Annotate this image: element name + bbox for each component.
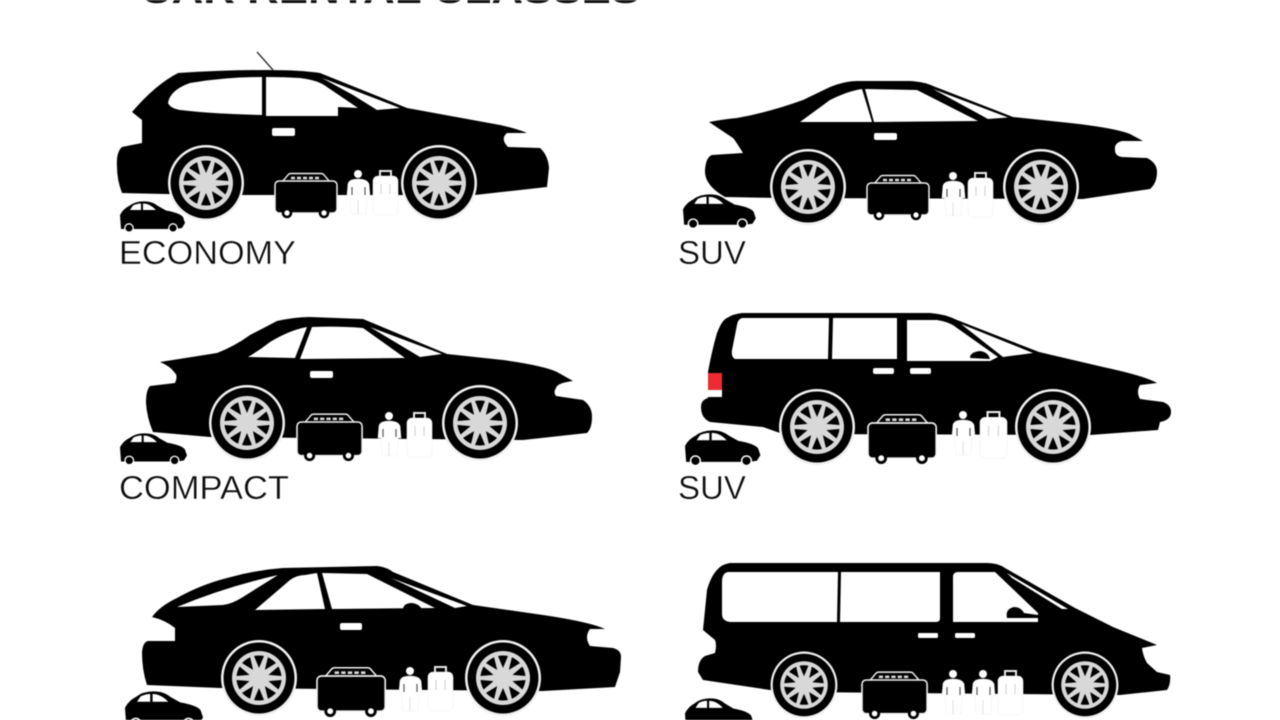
- compact luggage: [297, 414, 362, 460]
- economy luggage: [275, 174, 337, 217]
- minivan luggage: [862, 672, 927, 718]
- minivan small car icon: [685, 698, 753, 720]
- compact label: COMPACT: [119, 469, 289, 506]
- panel: minivan: [685, 563, 1170, 720]
- hatchback passenger: [399, 667, 422, 711]
- minivan first passenger: [942, 670, 965, 714]
- coupe small car icon: [683, 194, 756, 228]
- coupe luggage: [867, 176, 929, 219]
- wagon small car icon: [685, 430, 760, 466]
- hatchback small car icon: [125, 691, 203, 720]
- hatchback luggage: [317, 668, 385, 716]
- economy wheels: [168, 145, 477, 221]
- wagon label: SUV: [678, 469, 746, 506]
- wagon suitcase: [980, 412, 1007, 458]
- compact passenger: [378, 412, 401, 456]
- compact wheels: [209, 385, 518, 461]
- minivan wheels: [771, 652, 1118, 718]
- economy label: ECONOMY: [119, 234, 296, 271]
- minivan suitcase: [998, 671, 1023, 715]
- wagon passenger: [952, 411, 975, 455]
- economy car body: [117, 52, 549, 195]
- coupe passenger: [942, 172, 965, 216]
- minivan second passenger: [972, 670, 995, 714]
- hatchback suitcase: [428, 667, 453, 711]
- minivan body: [698, 563, 1170, 695]
- panel: top right car: [678, 81, 1157, 271]
- economy suitcase: [373, 171, 398, 215]
- coupe suitcase: [968, 173, 993, 217]
- coupe body: [705, 81, 1157, 199]
- panel: compact car: [119, 317, 592, 506]
- panel: wagon: [678, 313, 1171, 506]
- wagon wheels: [779, 389, 1091, 465]
- panel: economy car: [117, 52, 549, 271]
- compact small car icon: [120, 433, 187, 465]
- compact body: [146, 317, 592, 440]
- compact suitcase: [407, 413, 432, 457]
- economy passenger: [347, 170, 370, 214]
- economy small car icon: [120, 201, 185, 232]
- wagon body: [701, 313, 1171, 435]
- coupe label: SUV: [678, 234, 746, 271]
- wagon luggage: [868, 415, 936, 463]
- coupe wheels: [770, 149, 1079, 225]
- hatchback body: [142, 566, 621, 691]
- panel: hatchback: [125, 566, 621, 720]
- hatchback wheels: [221, 640, 541, 716]
